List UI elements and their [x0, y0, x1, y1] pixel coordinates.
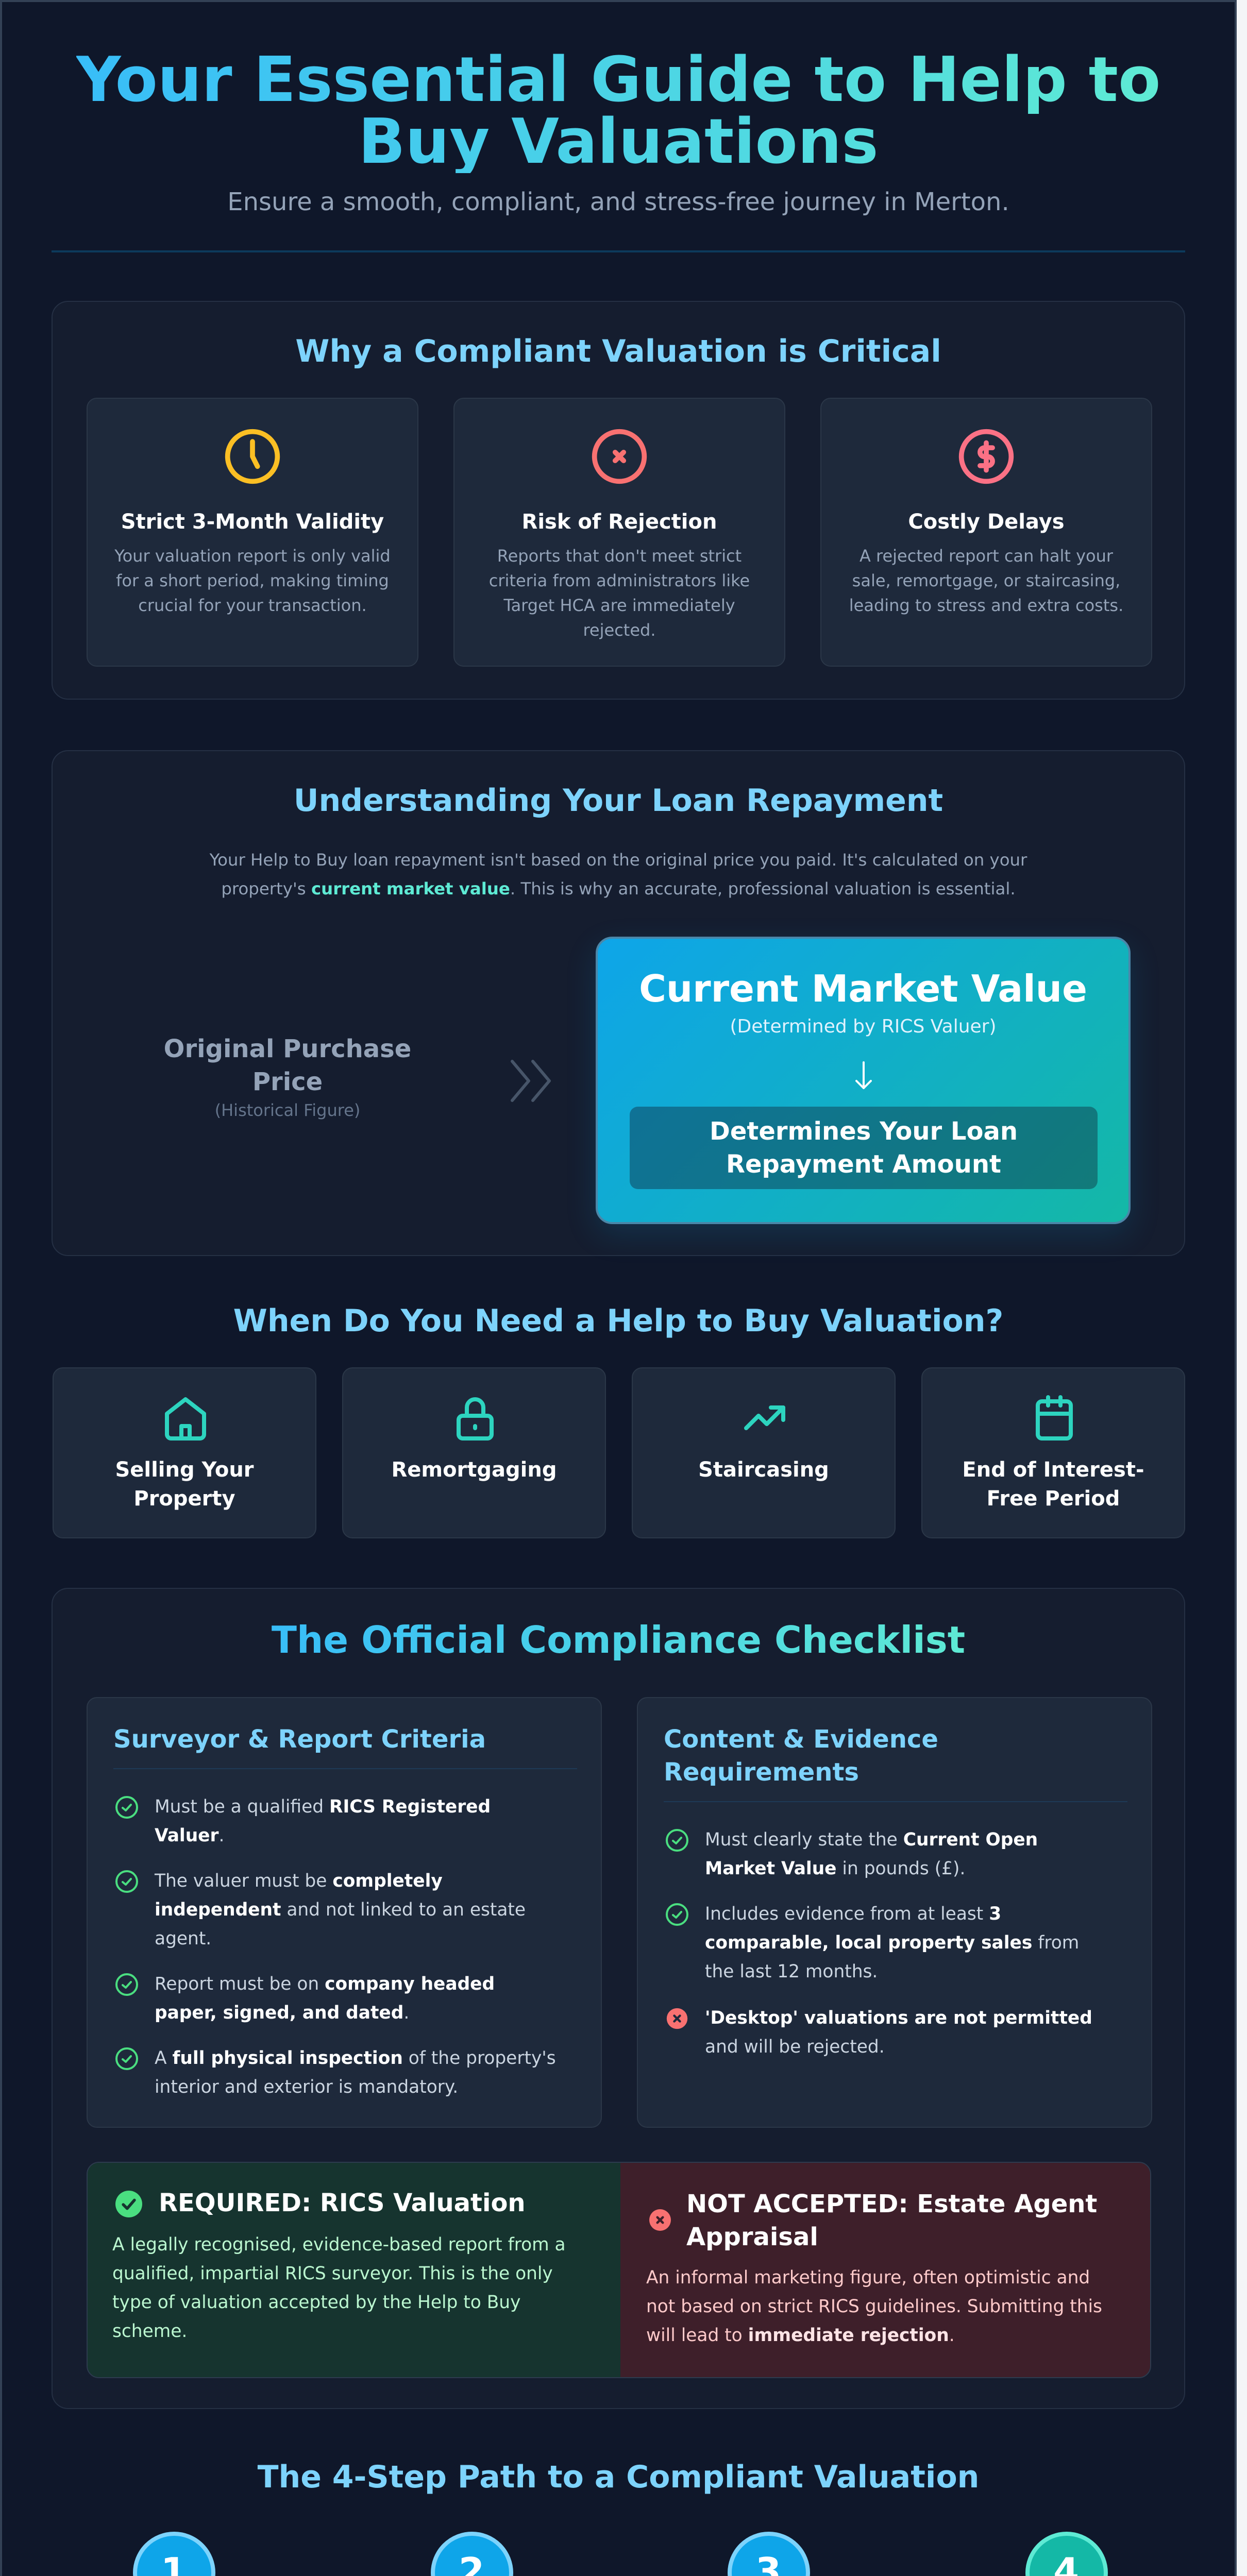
label: Staircasing	[698, 1457, 829, 1482]
description: type of valuation accepted by the Help to Buy	[112, 2293, 520, 2313]
repayment result box	[630, 1107, 1098, 1189]
title: Buy Valuations	[358, 106, 879, 178]
current market value box	[596, 937, 1131, 1224]
description: not based on strict RICS guidelines. Submitting this	[646, 2297, 1102, 2317]
card: strict 3-month validity	[87, 398, 418, 667]
item: comparables: the last 12 months.	[705, 1962, 878, 1982]
steps row	[52, 2532, 1185, 2576]
item: comparables: comparable, local property sales from	[705, 1933, 1079, 1954]
not accepted: estate agent appraisal	[620, 2163, 1152, 2379]
explanatory paragraph: Your Help to Buy loan repayment isn't based on the original price you paid. It's calculated on your	[210, 850, 1027, 870]
item: desktop not permitted: 'Desktop' valuations are not permitted	[705, 2008, 1092, 2029]
icon: check	[115, 1796, 138, 1819]
item: independent: The valuer must be completely	[155, 1871, 443, 1892]
heading: when do you need: When Do You Need a Help to Buy Valuation?	[233, 1303, 1003, 1340]
icon: green check	[115, 2191, 142, 2217]
label: Free Period	[987, 1486, 1120, 1511]
title	[76, 44, 1160, 178]
panel: official compliance checklist	[52, 1588, 1185, 2409]
repayment result box: Determines Your Loan	[710, 1117, 1018, 1146]
card title: Risk of Rejection	[522, 509, 717, 534]
item: RICS registered: Valuer.	[155, 1826, 224, 1846]
card heading: Content & Evidence	[664, 1725, 938, 1754]
card heading: Surveyor & Report Criteria	[113, 1725, 486, 1754]
icon: house	[165, 1397, 206, 1440]
card text: leading to stress and extra costs.	[849, 596, 1123, 615]
title: REQUIRED: RICS Valuation	[159, 2189, 526, 2217]
item: open market value: Market Value in pounds (£).	[705, 1859, 965, 1879]
heading: 4-step path: The 4-Step Path to a Compliant Valuation	[258, 2460, 979, 2496]
card: surveyor & report criteria	[87, 1697, 602, 2128]
label	[115, 1457, 254, 1511]
item: RICS registered: Must be a qualified RICS Registered	[155, 1797, 491, 1818]
explanatory paragraph: property's current market value. This is why an accurate, professional valuation is essential.	[221, 879, 1016, 899]
card: end of interest-free period	[921, 1367, 1185, 1538]
icon: x circle	[592, 429, 647, 484]
label: Remortgaging	[391, 1457, 557, 1482]
subtitle: Ensure a smooth, compliant, and stress-free journey in Merton.	[227, 188, 1009, 216]
heading: current market value: Current Market Value	[639, 969, 1087, 1011]
icon: check	[115, 1973, 138, 1996]
card heading	[664, 1723, 938, 1789]
title	[686, 2188, 1097, 2253]
card: risk of rejection	[453, 398, 785, 667]
title: Appraisal	[686, 2223, 818, 2251]
card text	[114, 546, 391, 615]
description: will lead to immediate rejection.	[646, 2326, 955, 2346]
icon: check	[665, 1902, 689, 1927]
subtext: (Determined by RICS Valuer)	[730, 1016, 997, 1038]
card text	[849, 546, 1123, 615]
original purchase price: Original Purchase	[164, 1035, 411, 1063]
icon: check	[115, 2047, 138, 2070]
card: staircasing	[632, 1367, 896, 1538]
item: physical inspection: A full physical inspection of the property's	[155, 2048, 556, 2069]
item: RICS registered	[115, 1796, 491, 1846]
item: physical inspection: interior and exterior is mandatory.	[155, 2077, 458, 2098]
card title: Strict 3-Month Validity	[121, 509, 384, 534]
card heading: Requirements	[664, 1758, 859, 1787]
label: Property	[133, 1486, 235, 1511]
explanatory paragraph	[209, 850, 1027, 899]
icon: dollar circle	[958, 429, 1014, 484]
original purchase price: (Historical Figure)	[215, 1100, 360, 1120]
item: headed paper	[115, 1973, 495, 2024]
card: costly delays	[820, 398, 1152, 667]
icon: red x	[649, 2209, 671, 2231]
label	[962, 1457, 1144, 1511]
label: Selling Your	[115, 1457, 254, 1482]
item: headed paper: paper, signed, and dated.	[155, 2003, 409, 2024]
card: selling	[53, 1367, 316, 1538]
item: desktop not permitted: and will be rejected.	[705, 2037, 885, 2058]
card: remortgaging	[342, 1367, 606, 1538]
arrow down	[855, 1061, 872, 1089]
icon: clock	[225, 429, 280, 484]
card text: for a short period, making timing	[116, 571, 389, 590]
icon: lock	[457, 1397, 494, 1440]
original purchase price: Price	[252, 1067, 323, 1096]
description: A legally recognised, evidence-based report from a	[112, 2235, 566, 2256]
item: comparables	[638, 1900, 1143, 1987]
icon: red x	[666, 2007, 688, 2030]
card text: rejected.	[583, 620, 655, 640]
item: open market value: Must clearly state the Current Open	[705, 1830, 1038, 1851]
card text: criteria from administrators like	[489, 571, 750, 590]
item: desktop not permitted	[638, 2004, 1143, 2062]
description: An informal marketing figure, often optimistic and	[646, 2268, 1090, 2289]
card text: A rejected report can halt your	[860, 546, 1113, 566]
card title: Costly Delays	[908, 509, 1065, 534]
title: Your Essential Guide to Help to	[76, 44, 1160, 116]
scenario cards row	[53, 1367, 1185, 1538]
required: RICS valuation	[88, 2163, 621, 2379]
description	[646, 2264, 1102, 2350]
description: scheme.	[112, 2321, 187, 2342]
item: physical inspection	[115, 2047, 556, 2098]
card text: Reports that don't meet strict	[497, 546, 742, 566]
arrow: double chevron	[511, 1060, 551, 1102]
original purchase price	[164, 1035, 411, 1120]
panel: why a compliant valuation is critical	[52, 301, 1185, 700]
title: NOT ACCEPTED: Estate Agent	[686, 2190, 1097, 2218]
heading: compliance checklist: The Official Compliance Checklist	[272, 1620, 965, 1662]
repayment result box: Repayment Amount	[726, 1150, 1001, 1179]
card text: Your valuation report is only valid	[114, 546, 391, 566]
heading: loan repayment: Understanding Your Loan Repayment	[294, 783, 943, 819]
icon: check	[115, 1870, 138, 1893]
card text	[489, 546, 750, 640]
card text: sale, remortgage, or staircasing,	[852, 571, 1120, 590]
card text: crucial for your transaction.	[138, 596, 367, 615]
comparison: required vs not accepted	[87, 2162, 1151, 2378]
item: independent	[115, 1870, 526, 1950]
item: independent: agent.	[155, 1929, 211, 1950]
label: End of Interest-	[962, 1457, 1144, 1482]
card: content & evidence requirements	[637, 1697, 1152, 2128]
item: comparables: Includes evidence from at least 3	[705, 1904, 1001, 1925]
icon: calendar	[1036, 1395, 1073, 1440]
description	[112, 2231, 566, 2346]
icon: check	[665, 1828, 689, 1853]
card text: Target HCA are immediately	[503, 596, 735, 615]
item: independent: independent and not linked to an estate	[155, 1900, 526, 1921]
description: qualified, impartial RICS surveyor. This is the only	[112, 2264, 553, 2284]
icon: trending up	[744, 1405, 785, 1430]
heading: why critical: Why a Compliant Valuation is Critical	[295, 334, 941, 370]
item: headed paper: Report must be on company headed	[155, 1974, 495, 1995]
panel: understanding loan repayment	[52, 750, 1185, 1256]
item: open market value	[638, 1826, 1143, 1884]
